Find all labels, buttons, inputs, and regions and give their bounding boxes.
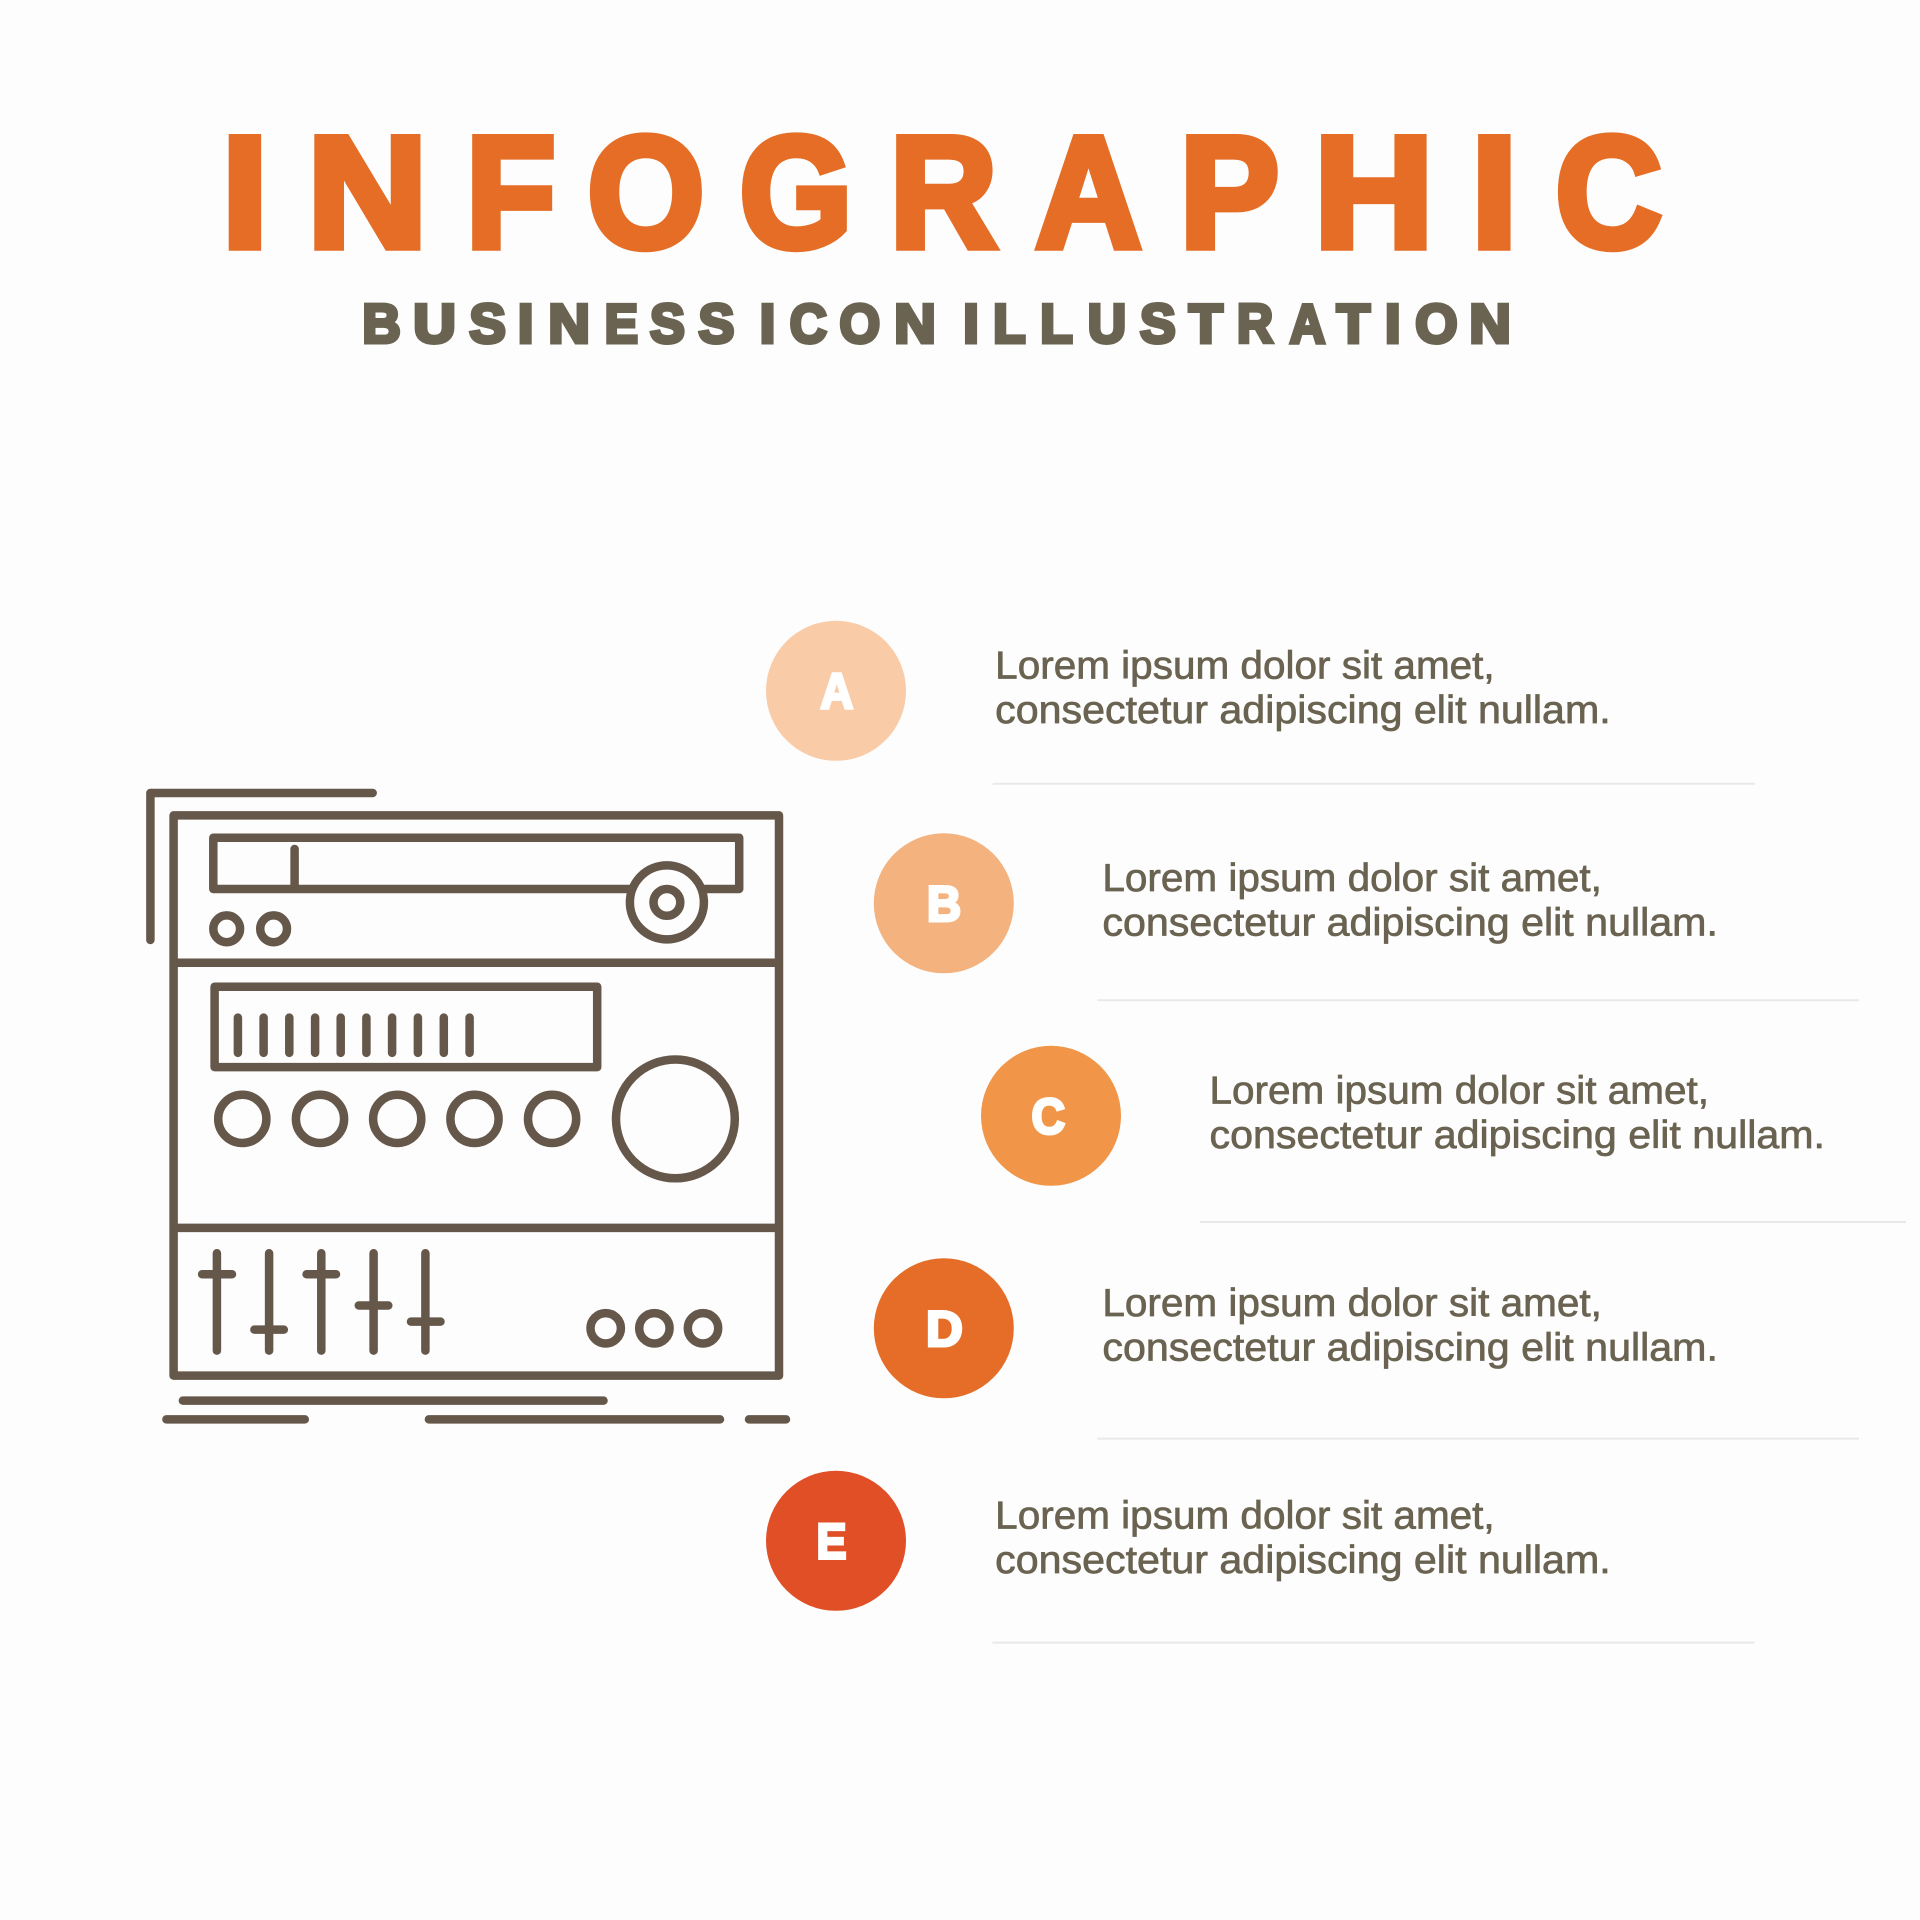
subtitle: L bbox=[1040, 294, 1073, 355]
subtitle: T bbox=[1337, 292, 1370, 355]
icon part: rack body with shelves bbox=[174, 815, 779, 1376]
text block E bbox=[995, 1494, 1611, 1582]
text block C bbox=[1210, 1070, 1825, 1157]
list item C bbox=[981, 1046, 1906, 1222]
icon part: three small knobs bbox=[590, 1313, 718, 1344]
list item B bbox=[874, 833, 1859, 1000]
icon part: mixer faders bbox=[202, 1253, 440, 1351]
subtitle: I bbox=[1385, 293, 1401, 355]
title: P bbox=[1180, 104, 1279, 281]
subtitle: N bbox=[1469, 293, 1511, 354]
circle badge E bbox=[766, 1471, 906, 1611]
text block E: Lorem ipsum dolor sit amet, bbox=[995, 1494, 1495, 1538]
title: R bbox=[890, 104, 997, 281]
text block D: consectetur adipiscing elit nullam. bbox=[1102, 1326, 1718, 1370]
title: O bbox=[588, 103, 704, 281]
subtitle: I bbox=[760, 293, 775, 355]
icon part: equalizer display bbox=[215, 987, 597, 1067]
circle badge A bbox=[766, 621, 906, 761]
subtitle: U bbox=[413, 294, 456, 355]
circle badge D: D bbox=[926, 1300, 963, 1357]
icon: stereo rack system bbox=[150, 793, 786, 1419]
subtitle: U bbox=[1088, 294, 1126, 355]
text block D bbox=[1102, 1282, 1718, 1370]
subtitle: L bbox=[993, 294, 1026, 355]
title: I bbox=[1471, 105, 1517, 281]
subtitle: S bbox=[1140, 294, 1176, 355]
subtitle: I bbox=[963, 293, 979, 355]
circle badge A: A bbox=[820, 665, 853, 720]
subtitle: E bbox=[605, 294, 638, 355]
text block A: Lorem ipsum dolor sit amet, bbox=[995, 644, 1495, 688]
subtitle: B bbox=[362, 294, 401, 355]
icon part: large volume dial bbox=[616, 1060, 735, 1178]
subtitle: N bbox=[894, 293, 936, 354]
icon part: disc tray bbox=[213, 838, 739, 889]
subtitle: R bbox=[1237, 294, 1273, 355]
text block B: consectetur adipiscing elit nullam. bbox=[1102, 902, 1718, 944]
text block A: consectetur adipiscing elit nullam. bbox=[995, 689, 1611, 732]
subtitle bbox=[362, 292, 1511, 355]
list item E bbox=[766, 1471, 1754, 1643]
title: N bbox=[307, 104, 427, 281]
circle badge D bbox=[874, 1258, 1014, 1398]
text block B bbox=[1102, 857, 1718, 944]
subtitle: N bbox=[548, 293, 590, 354]
text block C: consectetur adipiscing elit nullam. bbox=[1210, 1114, 1825, 1157]
list item A bbox=[766, 621, 1755, 784]
subtitle: S bbox=[650, 293, 685, 355]
subtitle: A bbox=[1290, 294, 1325, 355]
title: H bbox=[1314, 105, 1434, 281]
text block E: consectetur adipiscing elit nullam. bbox=[995, 1539, 1611, 1582]
title: I bbox=[222, 105, 268, 281]
title: C bbox=[1556, 105, 1662, 281]
circle badge C: C bbox=[1032, 1089, 1065, 1145]
circle badge B bbox=[874, 833, 1014, 973]
subtitle: S bbox=[469, 292, 506, 355]
circle badge B: B bbox=[927, 877, 961, 932]
circle badge E: E bbox=[816, 1514, 847, 1570]
icon part: two small buttons bbox=[213, 915, 287, 942]
title: A bbox=[1036, 105, 1141, 281]
list item D bbox=[874, 1258, 1859, 1439]
title bbox=[222, 103, 1662, 281]
subtitle: O bbox=[840, 293, 880, 355]
title: F bbox=[466, 105, 555, 281]
subtitle: S bbox=[698, 293, 734, 355]
circle badge C bbox=[981, 1046, 1121, 1186]
subtitle: T bbox=[1189, 293, 1223, 355]
icon part: five round dials bbox=[218, 1095, 576, 1143]
subtitle: C bbox=[790, 294, 827, 355]
text block C: Lorem ipsum dolor sit amet, bbox=[1210, 1070, 1709, 1112]
text block D: Lorem ipsum dolor sit amet, bbox=[1102, 1282, 1602, 1325]
subtitle: I bbox=[518, 293, 533, 355]
text block A bbox=[995, 644, 1611, 732]
icon part: back corner outline bbox=[150, 793, 373, 940]
title: G bbox=[740, 105, 852, 281]
text block B: Lorem ipsum dolor sit amet, bbox=[1102, 857, 1602, 900]
icon part: ground lines bbox=[166, 1401, 786, 1419]
subtitle: O bbox=[1415, 293, 1457, 355]
icon part: tray knob bbox=[630, 865, 704, 939]
